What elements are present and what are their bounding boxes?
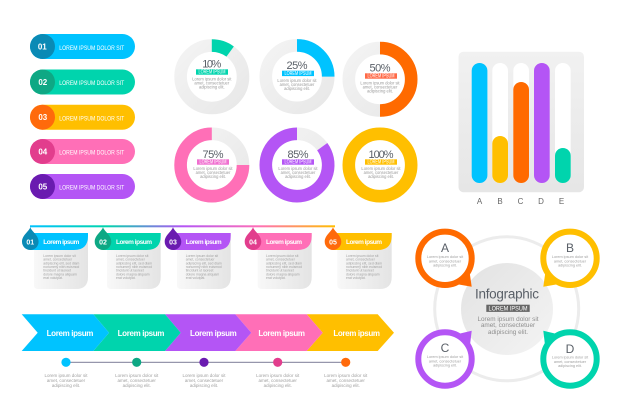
bubble C: Lorem ipsum dolor sit	[427, 355, 464, 359]
pill 02: 02	[38, 78, 48, 87]
bubble D	[543, 331, 597, 386]
step 04: dolore magna aliquam	[266, 272, 300, 276]
milestone 5: Lorem ipsum dolor sit	[324, 373, 368, 378]
milestone 4: amet, consectetuer	[259, 378, 297, 383]
step 04: Lorem ipsum dolor sit	[266, 254, 298, 258]
donut 10%: 10%	[202, 58, 222, 70]
step 05: Lorem ipsum	[346, 239, 382, 246]
step 01: erat volutpat.	[43, 276, 63, 280]
step 04: tincidunt ut laoreet	[266, 269, 294, 273]
step 02: adipiscing elit, sed diam	[116, 261, 152, 265]
step 04: adipiscing elit, sed diam	[266, 261, 302, 265]
donut 85%	[266, 134, 328, 196]
donut 10%: LOREM IPSUM	[198, 70, 226, 76]
step 02: amet, consectetuer	[116, 258, 146, 262]
bubble C: adipiscing elit.	[433, 364, 457, 368]
axis labels: B	[497, 197, 503, 206]
panel: step timeline	[22, 225, 392, 289]
panel: chevron arrows	[22, 314, 394, 351]
pill 04: 04	[38, 148, 48, 156]
donut 25%: LOREM IPSUM	[284, 71, 312, 77]
bubble B: adipiscing elit.	[558, 264, 582, 268]
donut 25%: Lorem ipsum dolor sit	[277, 78, 317, 83]
step 03: dolore magna aliquam	[186, 272, 219, 276]
step 04: nonummy nibh euismod	[266, 265, 302, 269]
step 01: tincidunt ut laoreet	[43, 269, 71, 273]
milestone 1	[44, 358, 88, 388]
pill 05: LOREM IPSUM DOLOR SIT	[59, 184, 124, 192]
step 03: tincidunt ut laoreet	[186, 269, 213, 273]
milestone 4: Lorem ipsum dolor sit	[256, 373, 300, 378]
donut 50%: adipiscing elit.	[367, 88, 393, 94]
connector line	[30, 225, 335, 227]
milestone 1: adipiscing elit.	[52, 383, 80, 388]
step 01: dolore magna aliquam	[43, 272, 77, 276]
donut 100%: Lorem ipsum dolor sit	[361, 166, 401, 171]
step 05: nonummy nibh euismod	[346, 265, 382, 269]
pill 04	[30, 139, 135, 164]
donut 25%: amet, consectetuer	[280, 82, 315, 87]
step 03	[165, 227, 231, 289]
donut 25%: adipiscing elit.	[284, 86, 310, 91]
milestone 4: adipiscing elit.	[264, 383, 292, 388]
arrow 2: Lorem ipsum	[118, 329, 164, 338]
axis labels: C	[518, 197, 524, 206]
centre circle: adipiscing elit.	[488, 329, 528, 336]
step 05: 05	[329, 239, 337, 246]
step 05	[325, 227, 392, 289]
step 03: adipiscing elit, sed diam	[186, 261, 222, 265]
pill 01: 01	[38, 42, 47, 52]
bar E	[555, 148, 571, 183]
donut 75%	[181, 134, 243, 196]
bubble D: amet, consectetuer	[554, 360, 587, 364]
pill 05: 05	[38, 182, 48, 192]
pill 04: LOREM IPSUM DOLOR SIT	[59, 150, 124, 156]
panel: numbered pill list	[30, 34, 135, 199]
bubble A	[418, 232, 472, 287]
bubble D: D	[566, 342, 575, 356]
milestone 2: Lorem ipsum dolor sit	[115, 373, 159, 378]
milestone 3: adipiscing elit.	[190, 383, 218, 388]
step 05: adipiscing elit, sed diam	[346, 261, 382, 265]
arrow 4: Lorem ipsum	[258, 329, 305, 338]
centre circle: Infographic	[475, 286, 539, 302]
donut 75%: adipiscing elit.	[200, 174, 226, 179]
milestone 3: Lorem ipsum dolor sit	[182, 373, 226, 378]
step 04: Lorem ipsum	[266, 239, 302, 246]
donut 75%: LOREM IPSUM	[200, 160, 226, 166]
donut 10%: adipiscing elit.	[199, 84, 225, 90]
bubble B: amet, consectetuer	[554, 259, 587, 263]
bubble A: Lorem ipsum dolor sit	[427, 255, 464, 259]
bubble A: adipiscing elit.	[433, 264, 457, 268]
milestone 1: amet, consectetuer	[47, 378, 86, 383]
axis labels	[477, 197, 564, 206]
donut 100%: 100%	[368, 149, 394, 161]
axis labels: E	[559, 197, 564, 206]
milestone 1: Lorem ipsum dolor sit	[44, 373, 88, 378]
pill 01	[30, 34, 135, 59]
step 04: amet, consectetuer	[266, 258, 296, 262]
bubble D: Lorem ipsum dolor sit	[552, 356, 589, 360]
step 01: adipiscing elit, sed diam	[43, 261, 79, 265]
donut 75%: 75%	[202, 149, 224, 161]
arrow 3	[165, 314, 251, 351]
bar A	[472, 63, 487, 183]
arrow 5: Lorem ipsum	[333, 329, 380, 338]
centre circle: Lorem ipsum dolor sit	[477, 316, 539, 323]
bubble A: A	[441, 241, 449, 255]
step 01: 01	[26, 239, 34, 246]
step 05: dolore magna aliquam	[346, 272, 380, 276]
step 01	[22, 227, 88, 289]
milestone 4	[256, 358, 300, 388]
bubble B	[543, 232, 597, 287]
step 01: nonummy nibh euismod	[43, 265, 79, 269]
pill 01: LOREM IPSUM DOLOR SIT	[59, 45, 124, 52]
step 03: Lorem ipsum dolor sit	[186, 254, 218, 258]
milestone 2	[115, 358, 159, 388]
centre circle: LOREM IPSUM	[488, 306, 528, 313]
donut 50%: Lorem ipsum dolor sit	[360, 81, 400, 86]
step 03: erat volutpat.	[186, 276, 205, 280]
bubble A: amet, consectetuer	[429, 259, 462, 263]
donut 75%: Lorem ipsum dolor sit	[193, 166, 233, 171]
step 04: erat volutpat.	[266, 276, 286, 280]
panel: hub infographic	[418, 232, 597, 386]
step 04	[245, 227, 312, 289]
donut 100%: LOREM IPSUM	[368, 160, 394, 166]
arrow 3: Lorem ipsum	[190, 329, 237, 338]
step 03: 03	[169, 239, 177, 246]
centre circle	[461, 263, 553, 355]
pill 02: LOREM IPSUM DOLOR SIT	[59, 80, 124, 87]
donut 50%	[349, 48, 411, 110]
step 01: Lorem ipsum dolor sit	[43, 254, 76, 258]
milestone 2: adipiscing elit.	[123, 383, 151, 388]
axis labels: D	[538, 197, 544, 206]
step 02: Lorem ipsum dolor sit	[116, 254, 148, 258]
donut 85%: amet, consectetuer	[281, 170, 316, 175]
arrow 1	[22, 314, 109, 351]
bar B	[492, 136, 508, 183]
bubble C: C	[441, 341, 450, 355]
pill 03	[30, 105, 135, 130]
step 02: dolore magna aliquam	[116, 272, 150, 276]
step 01: amet, consectetuer	[43, 258, 73, 262]
donut 100%: adipiscing elit.	[368, 174, 394, 179]
step 05: amet, consectetuer	[346, 258, 376, 262]
bar D	[534, 63, 550, 183]
donut 100%: amet, consectetuer	[364, 170, 399, 175]
step 05: erat volutpat.	[346, 276, 366, 280]
step 02: 02	[99, 239, 107, 246]
pill 05	[30, 174, 135, 199]
donut 50%: 50%	[370, 63, 391, 75]
arrow 2	[93, 314, 181, 351]
milestone 3	[182, 358, 226, 388]
bar chart	[458, 52, 584, 206]
step 03: Lorem ipsum	[186, 239, 222, 246]
panel: donut charts	[181, 45, 411, 196]
milestone 3: amet, consectetuer	[185, 378, 224, 383]
bubble C	[418, 331, 472, 386]
step 02: erat volutpat.	[116, 276, 136, 280]
arrow 1: Lorem ipsum	[47, 329, 93, 338]
milestone 5: adipiscing elit.	[332, 383, 360, 388]
step 03: nonummy nibh euismod	[186, 265, 222, 269]
milestone 5	[324, 358, 368, 388]
donut 50%: LOREM IPSUM	[368, 74, 394, 80]
donut 50%: amet, consectetuer	[363, 85, 398, 90]
bubble C: amet, consectetuer	[429, 359, 462, 363]
donut 85%: LOREM IPSUM	[284, 160, 312, 166]
panel: dot milestones	[44, 358, 368, 388]
arrow 5	[307, 314, 394, 351]
milestone 5: amet, consectetuer	[327, 378, 365, 383]
step 04: 04	[249, 239, 257, 246]
step 01: Lorem ipsum	[43, 239, 80, 246]
step 05: tincidunt ut laoreet	[346, 269, 374, 273]
donut 85%: 85%	[288, 149, 309, 161]
step 05: Lorem ipsum dolor sit	[346, 254, 378, 258]
donut 10%: amet, consectetuer	[194, 81, 230, 86]
step 02	[95, 227, 161, 289]
bubble B: Lorem ipsum dolor sit	[552, 255, 589, 259]
donut 25%	[266, 45, 328, 108]
arrow 4	[235, 314, 323, 351]
step 02: tincidunt ut laoreet	[116, 269, 144, 273]
bubble B: B	[566, 241, 574, 255]
donut 25%: 25%	[286, 60, 308, 72]
bubble D: adipiscing elit.	[558, 364, 582, 368]
donut 100%	[349, 134, 411, 196]
milestone 2: amet, consectetuer	[118, 378, 156, 383]
donut 85%: Lorem ipsum dolor sit	[278, 166, 318, 171]
donut 10%	[181, 46, 243, 108]
step 02: nonummy nibh euismod	[116, 265, 152, 269]
donut 75%: amet, consectetuer	[196, 170, 231, 175]
step 03: amet, consectetuer	[186, 258, 215, 262]
centre circle: amet, consectetuer	[481, 322, 536, 329]
pill 03: LOREM IPSUM DOLOR SIT	[59, 115, 124, 122]
pill 02	[30, 70, 135, 94]
donut 10%: Lorem ipsum dolor sit	[192, 77, 232, 82]
bar C	[513, 82, 529, 183]
step 02: Lorem ipsum	[116, 239, 152, 246]
donut 85%: adipiscing elit.	[285, 174, 311, 179]
axis labels: A	[477, 197, 483, 206]
pill 03: 03	[38, 113, 48, 122]
